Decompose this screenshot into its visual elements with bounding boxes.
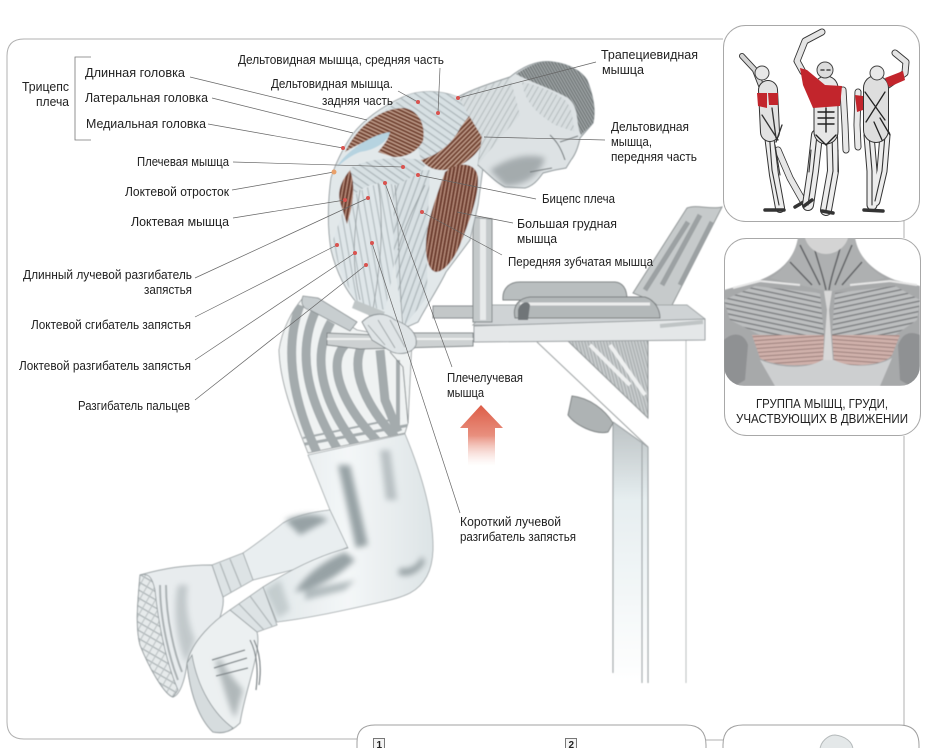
label: pectoralis major: мышца <box>517 232 557 246</box>
machine: upright post <box>473 217 492 322</box>
label: extensor carpi ulnaris: Локтевой разгибатель запястья <box>19 359 191 373</box>
exercise machine <box>400 207 722 683</box>
neck muscles <box>770 238 885 292</box>
arm left <box>724 335 748 386</box>
temple texture <box>522 82 575 132</box>
triceps tendon <box>337 132 390 167</box>
machine: bars <box>433 306 473 318</box>
label: extensor carpi radialis longus: запястья <box>144 283 192 297</box>
label: rear deltoid: задняя часть <box>322 94 393 108</box>
panel: bottom steps <box>357 725 706 748</box>
label: extensor carpi radialis longus: Длинный лучевой разгибатель <box>23 268 192 282</box>
shorts <box>279 298 412 455</box>
muscle contour lines <box>354 183 425 326</box>
pectoral muscle <box>426 165 478 272</box>
machine: brace triangle <box>567 340 648 418</box>
boot laces <box>212 640 260 690</box>
label: serratus anterior: Передняя зубчатая мышца <box>508 255 653 269</box>
label: trapezius: мышца <box>602 63 644 77</box>
label: pectoralis major <box>457 212 617 246</box>
label: pectoralis major: Большая грудная <box>517 217 617 231</box>
label: extensor digitorum: Разгибатель пальцев <box>78 399 190 413</box>
label: triceps heading <box>22 57 91 140</box>
label: olecranon <box>125 170 336 199</box>
label: lateral head: Латеральная головка <box>85 91 208 105</box>
figure: front view <box>797 32 846 213</box>
chest caption <box>736 397 908 426</box>
right pectoral lower band <box>832 335 900 365</box>
abdomen <box>760 358 892 386</box>
label: front deltoid: передняя часть <box>611 150 697 164</box>
upper arm muscles <box>345 158 425 205</box>
left pectoral <box>724 286 824 335</box>
label: front deltoid <box>484 120 697 164</box>
machine: brace lines <box>537 340 648 447</box>
label: brachioradialis: Плечелучевая <box>447 371 523 385</box>
label: olecranon: Локтевой отросток <box>125 185 230 199</box>
wrist band <box>352 300 385 320</box>
label: trapezius: Трапециевидная <box>601 48 698 62</box>
torso and arm base <box>328 92 484 330</box>
figure: back view <box>855 53 906 211</box>
label: triceps heading: Трицепс <box>22 80 69 94</box>
head outline <box>458 62 594 188</box>
label: middle deltoid: Дельтовидная мышца, средняя часть <box>238 53 444 67</box>
label: extensor carpi radialis brevis: разгибатель запястья <box>460 530 576 544</box>
label: extensor carpi ulnaris <box>19 251 357 373</box>
panel: bottom right <box>723 725 919 748</box>
boot rear <box>137 565 223 697</box>
label: medial head: Медиальная головка <box>86 117 206 131</box>
label: brachialis <box>137 155 405 169</box>
machine: backrest <box>633 207 722 313</box>
arrow: upward movement <box>460 405 503 466</box>
machine: platform front <box>474 319 705 342</box>
label: trapezius <box>456 48 698 100</box>
machine: platform top <box>473 305 705 326</box>
sternum <box>823 291 833 362</box>
label: front deltoid: мышца, <box>611 135 652 149</box>
left pectoral lower band <box>752 335 824 365</box>
label: serratus anterior <box>420 210 653 269</box>
neck texture <box>458 77 520 165</box>
label: triceps heading: плеча <box>36 95 69 109</box>
head sketch <box>820 735 853 748</box>
label: rear deltoid <box>271 77 420 108</box>
athlete figure <box>137 62 594 733</box>
label: brachialis: Плечевая мышца <box>137 155 229 169</box>
front leg <box>263 434 433 622</box>
arm right <box>898 333 920 386</box>
hanging strap <box>390 352 408 423</box>
label: middle deltoid <box>238 53 444 115</box>
sock rear <box>212 553 253 597</box>
label: biceps <box>416 173 615 206</box>
step 2 marker <box>566 738 576 748</box>
label: long head <box>85 66 367 120</box>
label: brachioradialis: мышца <box>447 386 484 400</box>
forearm muscles <box>333 183 398 310</box>
chest side muscles <box>393 170 430 325</box>
label: extensor carpi radialis brevis: Короткий лучевой <box>460 515 561 529</box>
label: rear deltoid: Дельтовидная мышца. <box>271 77 393 91</box>
label: front deltoid: Дельтовидная <box>611 120 689 134</box>
face shading <box>490 156 545 186</box>
machine: hanging pad <box>568 396 613 433</box>
label: anconeus: Локтевая мышца <box>131 215 229 229</box>
machine: lower post <box>613 422 648 683</box>
elbow muscle <box>339 170 353 224</box>
label: flexor carpi ulnaris <box>31 243 339 332</box>
label: extensor carpi radialis brevis <box>370 241 576 544</box>
chest caption: ГРУППА МЫШЦ, ГРУДИ, <box>756 397 888 411</box>
label: flexor carpi ulnaris: Локтевой сгибатель запястья <box>31 318 191 332</box>
panel: chest muscles <box>724 238 920 436</box>
machine: seat pads <box>503 282 627 300</box>
left bar <box>327 333 400 349</box>
label: brachioradialis <box>383 181 523 400</box>
deltoid rear <box>385 92 472 160</box>
label: biceps: Бицепс плеча <box>542 192 615 206</box>
label: extensor carpi radialis longus <box>23 196 370 297</box>
hair <box>516 62 594 135</box>
boot front <box>187 610 258 733</box>
leg shading <box>265 450 425 618</box>
shoulder highlight <box>733 281 917 288</box>
right pectoral <box>832 286 920 335</box>
figure: side view <box>742 56 807 210</box>
label: extensor digitorum <box>78 263 368 413</box>
triceps muscle <box>345 108 424 157</box>
sock front <box>230 587 277 632</box>
label: long head: Длинная головка <box>85 66 185 80</box>
hand <box>362 314 416 354</box>
step 1 marker <box>374 738 384 748</box>
label: lateral head <box>85 91 353 133</box>
panel: muscle figures <box>724 26 920 222</box>
chest illustration <box>724 238 920 386</box>
label: medial head <box>86 117 345 150</box>
label: anconeus <box>131 198 347 229</box>
head and neck <box>458 62 594 188</box>
machine: right leg <box>685 340 687 683</box>
waistband <box>302 296 357 331</box>
back leg <box>243 510 348 580</box>
face lines <box>530 135 578 172</box>
chest caption: УЧАСТВУЮЩИХ В ДВИЖЕНИИ <box>736 412 908 426</box>
front deltoid <box>421 116 484 170</box>
